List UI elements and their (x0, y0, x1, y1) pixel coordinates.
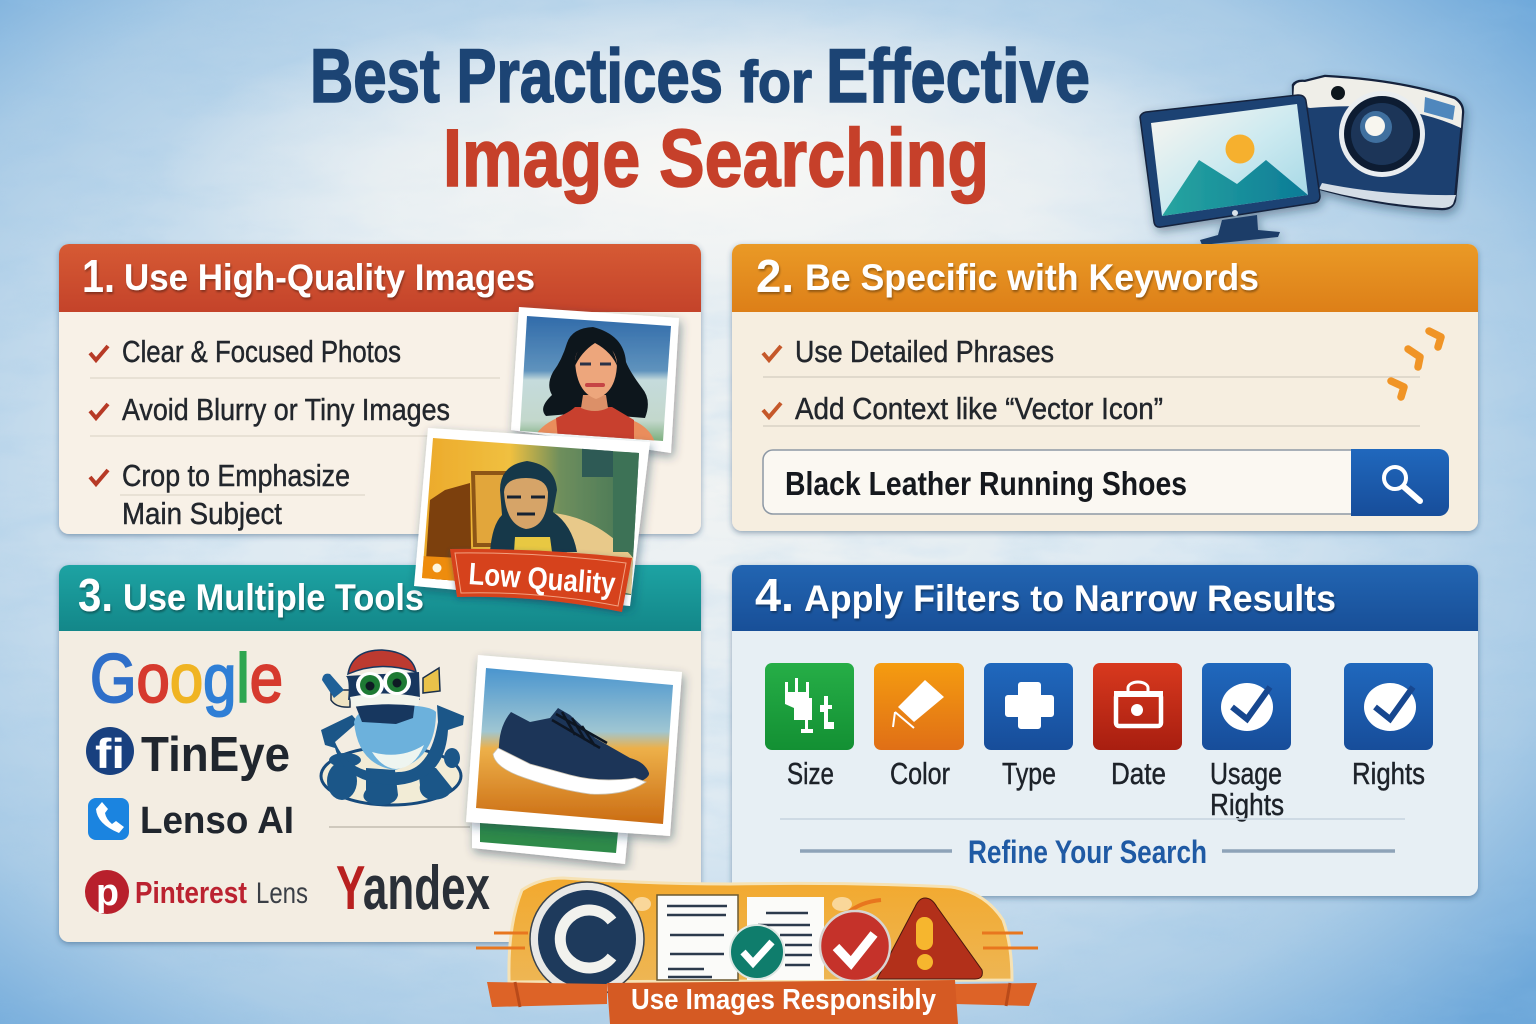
title: Best Practices (310, 34, 723, 119)
belly (354, 705, 436, 770)
refine your search: Refine Your Search (968, 834, 1207, 870)
filter: size (765, 663, 854, 791)
panel: 1 use high-quality images (59, 244, 701, 534)
filter: type: Type (1002, 756, 1056, 791)
badge: use images responsibly (476, 878, 1038, 1024)
ribbon (487, 980, 1037, 1024)
icon: red check (820, 911, 890, 981)
shoe photo stack (466, 655, 682, 864)
panel 2 checklist (763, 334, 1420, 426)
ribbon: Use Images Responsibly (631, 984, 936, 1016)
goggles (356, 669, 411, 698)
photo: low quality (414, 428, 650, 606)
icon: copyright (530, 882, 644, 996)
filter: color: Color (890, 756, 950, 791)
mascot (321, 650, 464, 805)
logo: tineye (86, 727, 290, 782)
panel 3 header (59, 565, 701, 631)
panel 1 checklist (90, 334, 505, 531)
panel 1 checklist: Avoid Blurry or Tiny Images (122, 392, 450, 427)
panel 1 header: Use High-Quality Images (124, 257, 535, 298)
panel 4 header (732, 565, 1478, 631)
panel: 4 apply filters (732, 565, 1478, 896)
filter: rights: Rights (1352, 756, 1425, 791)
icon: documents (657, 895, 824, 980)
panel 2 checklist: Use Detailed Phrases (795, 334, 1054, 369)
logo: google: Google (90, 640, 283, 717)
swim ring (321, 747, 461, 805)
panel 1 checklist: Crop to Emphasize (122, 458, 350, 493)
panel 3 header: 3. (78, 569, 113, 621)
filter: usage rights (1202, 663, 1291, 822)
filter: size: Size (787, 756, 834, 791)
filter: usage rights: Rights (1210, 787, 1284, 822)
panel 2 header: Be Specific with Keywords (805, 257, 1259, 298)
orange banner (509, 878, 1012, 982)
logo: pinterest lens: Lens (256, 877, 308, 910)
search button (1351, 449, 1449, 516)
panel 2 header (732, 244, 1478, 312)
title: Image Searching (443, 113, 989, 204)
arms and torso ring (321, 705, 464, 785)
filter: rights (1344, 663, 1433, 791)
icon: camera and monitor (1140, 76, 1463, 245)
logo: lenso ai: Lenso AI (140, 800, 294, 842)
title: Effective (826, 34, 1090, 119)
banner highlights (633, 897, 881, 913)
panel 3 header: Use Multiple Tools (123, 577, 424, 618)
panel 2 checklist: Add Context like “Vector Icon” (795, 391, 1163, 426)
panel 4 header: Apply Filters to Narrow Results (804, 578, 1336, 619)
filter: date: Date (1111, 756, 1166, 791)
filter: usage rights: Usage (1210, 756, 1282, 791)
panel 1 header: 1. (82, 250, 115, 302)
search bar: Black Leather Running Shoes (785, 465, 1187, 502)
filter: color (874, 663, 964, 791)
icon: camera (1293, 76, 1463, 209)
search bar (763, 449, 1449, 516)
title (310, 34, 1090, 204)
icon: green check (730, 925, 784, 979)
filter: type (984, 663, 1073, 791)
low quality badge: Low Quality (468, 556, 617, 601)
logo: pinterest lens: p (96, 872, 119, 914)
front photo (466, 655, 682, 836)
icon: orange sparkle marks (1391, 331, 1441, 397)
logo: lenso ai (88, 798, 294, 842)
panel 1 checklist: Clear & Focused Photos (122, 334, 401, 369)
icon: monitor (1140, 95, 1320, 245)
photo: high quality portrait (511, 307, 680, 453)
logo: tineye: fi (95, 730, 125, 777)
logo: tineye: TinEye (141, 728, 290, 782)
title: for (740, 50, 812, 115)
icon: warning triangle (877, 898, 982, 979)
filter: date (1093, 663, 1182, 791)
back photo (472, 822, 628, 864)
logo: pinterest lens (85, 870, 308, 914)
panel 2 header: 2. (756, 250, 794, 302)
panel: 3 use multiple tools (59, 565, 701, 942)
legs (363, 768, 452, 805)
panel: 2 be specific with keywords (732, 244, 1478, 531)
panel 4 header: 4. (755, 569, 794, 621)
panel 1 header (59, 244, 701, 312)
panel 1 checklist: Main Subject (122, 496, 282, 531)
logo: pinterest lens: Pinterest (135, 875, 247, 910)
head (331, 690, 350, 707)
shoe (493, 708, 649, 794)
low quality badge (450, 549, 632, 612)
logo: yandex: Yandex (336, 854, 490, 923)
speed lines (476, 933, 1038, 948)
